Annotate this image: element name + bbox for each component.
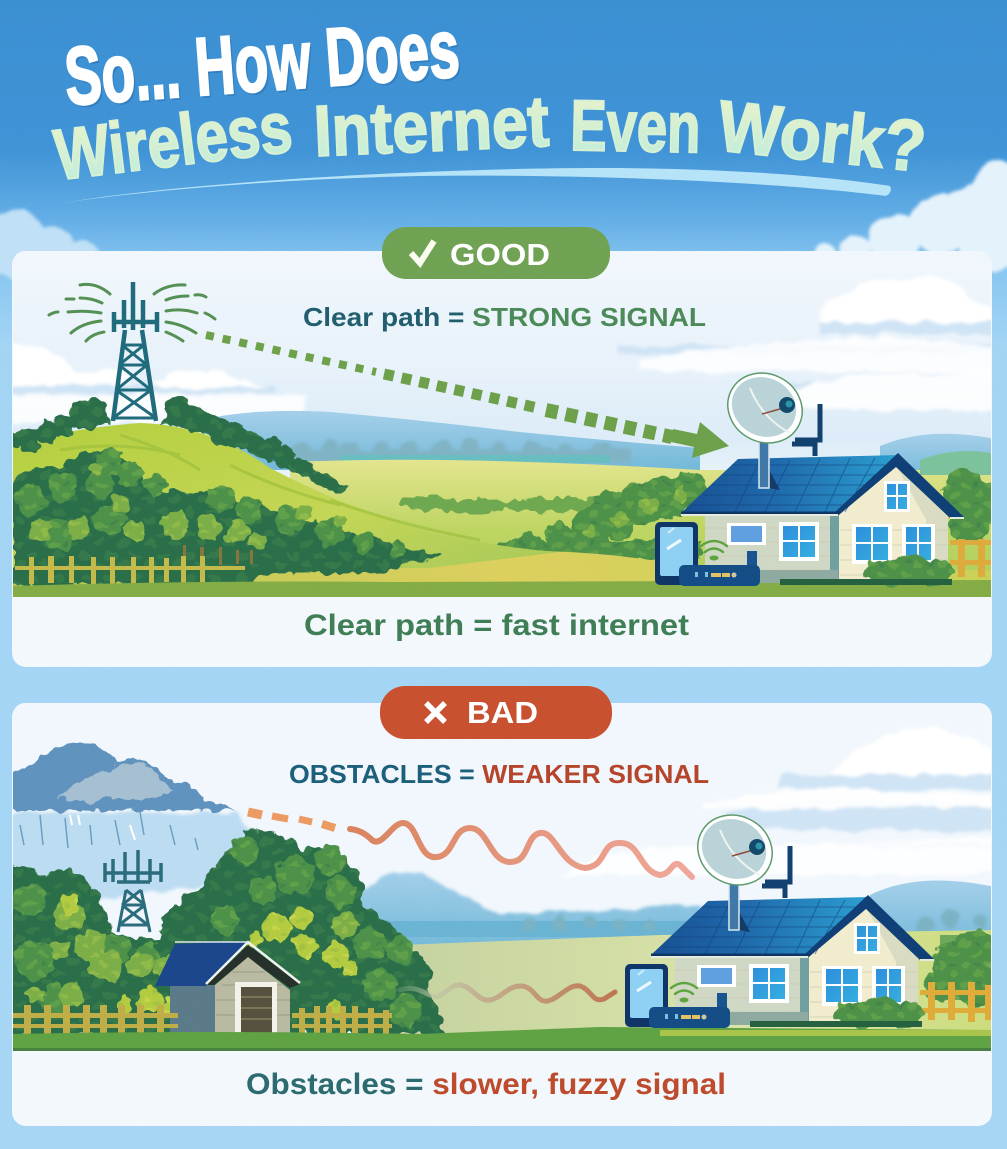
icon: cell tower [113, 282, 157, 421]
haze rain [5, 812, 260, 900]
fence [15, 556, 245, 584]
panel: good [5, 251, 1007, 667]
clouds [560, 725, 1000, 875]
storm cloud [5, 742, 235, 811]
badge: good: GOOD [450, 237, 550, 272]
scene: good landscape [5, 251, 1007, 597]
wavy weak signal [350, 823, 692, 877]
title line 2: Internet [312, 82, 550, 172]
title line 2: Work? [714, 86, 930, 188]
fence right of small house [292, 1006, 392, 1034]
title line 2: Even [570, 86, 701, 168]
small house [155, 941, 300, 1034]
distant mountains [350, 870, 700, 950]
heading: good: Clear path = STRONG SIGNAL [303, 302, 706, 332]
right trees [495, 470, 1007, 560]
wavy fuzzy signal [400, 985, 615, 1001]
fields [400, 930, 991, 1034]
signal arrow dashed [206, 335, 672, 437]
heading: bad: OBSTACLES = WEAKER SIGNAL [289, 759, 709, 789]
title swoosh [62, 168, 891, 203]
distant mountains [210, 411, 700, 470]
foreground meadow [13, 551, 991, 586]
badge: bad [380, 686, 612, 739]
fields [290, 460, 991, 570]
clouds behind panels [0, 160, 1007, 279]
icon: signal arcs [49, 284, 215, 341]
far treeline [290, 439, 630, 462]
yellow fence right [950, 539, 991, 577]
house group top [655, 360, 964, 586]
caption: good: Clear path = fast internet [304, 609, 689, 642]
big hill [13, 423, 560, 568]
title line 2: Wireless [50, 87, 296, 196]
badge: bad: BAD [467, 695, 538, 730]
signal dashes [248, 812, 335, 828]
ground strip [13, 580, 991, 597]
rain [20, 812, 198, 850]
fence left [13, 1005, 178, 1034]
house group bottom [625, 802, 934, 1028]
panel: bad [5, 703, 1000, 1126]
scene: bad landscape [5, 703, 1000, 1055]
title [50, 3, 930, 196]
clouds [5, 276, 1000, 423]
title line 2 [50, 82, 930, 196]
ground [13, 1027, 991, 1048]
big trees [5, 830, 445, 1034]
bottom-right trees and fence [924, 930, 997, 1007]
left forest [13, 449, 440, 586]
icon: small tower [105, 850, 161, 932]
badge: good [382, 227, 610, 279]
back bushes on hill [13, 395, 350, 495]
caption: bad: Obstacles = slower, fuzzy signal [246, 1068, 726, 1101]
